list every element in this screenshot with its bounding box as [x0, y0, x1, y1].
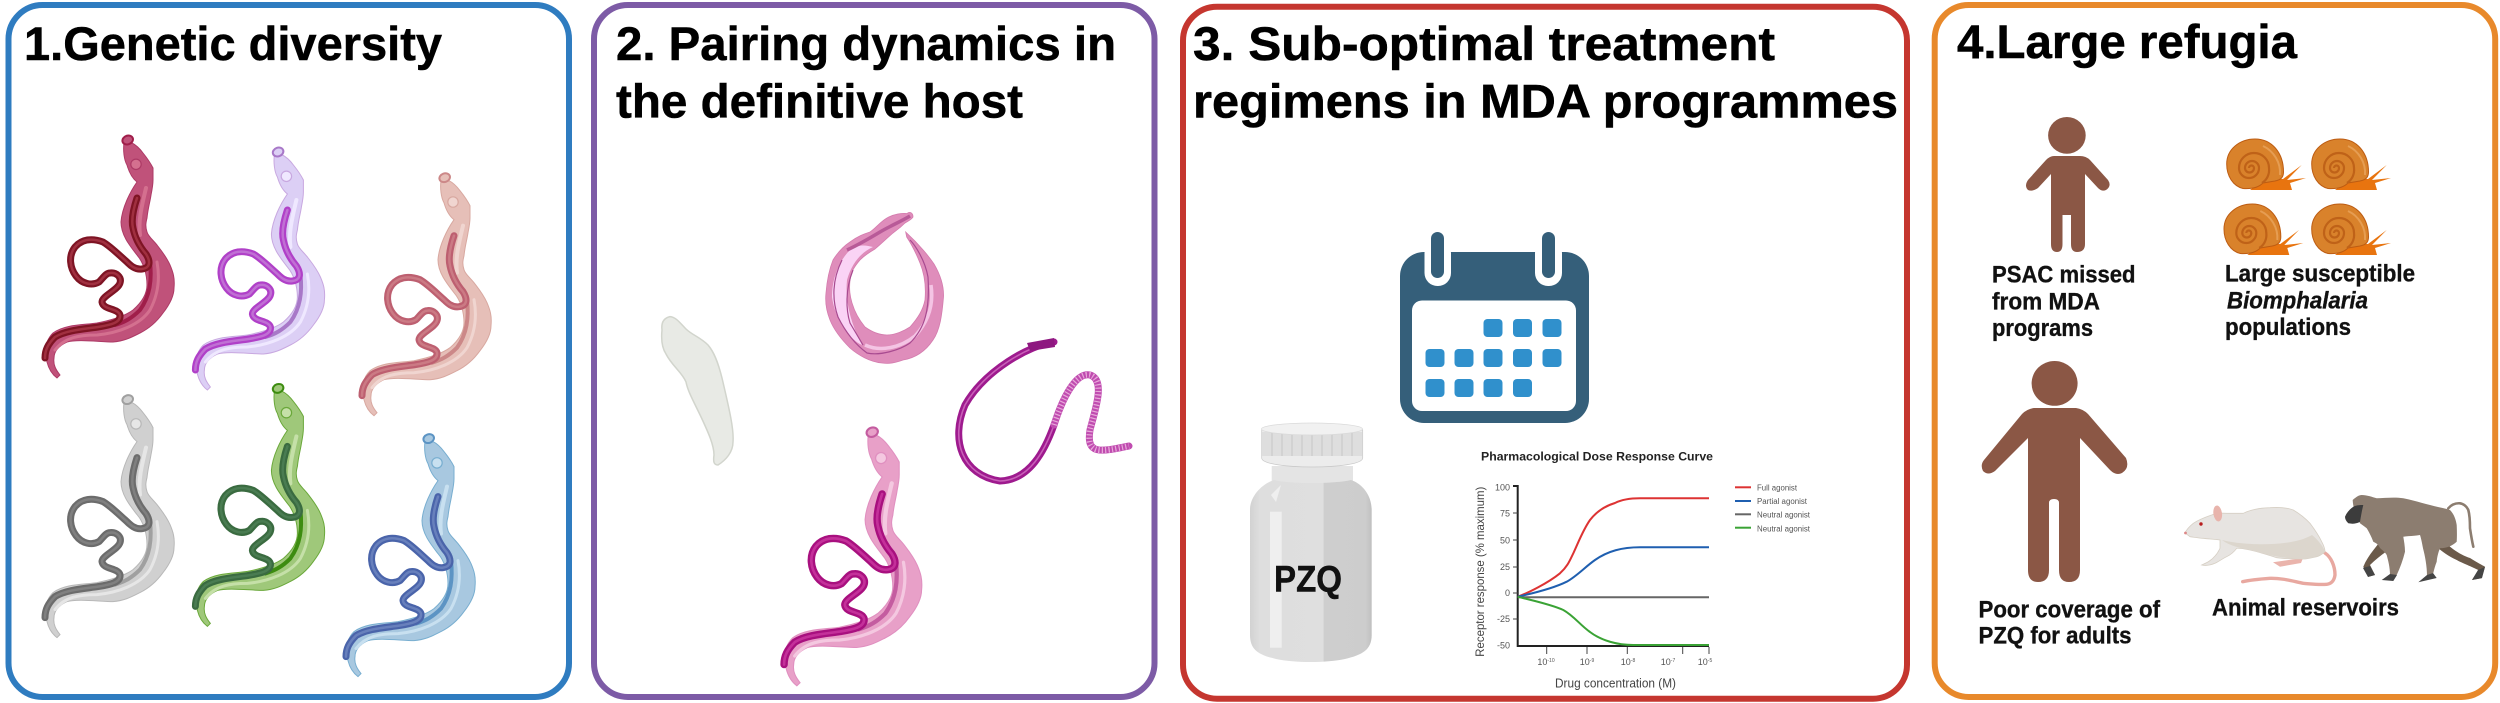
panel 2 frame — [594, 5, 1154, 697]
heading 2 second line: the definitive host — [616, 74, 1023, 128]
x axis ticks: 10 — [1698, 657, 1708, 667]
panel: genetic diversity — [8, 5, 569, 697]
icon: snails — [2224, 139, 2391, 255]
curve: partial agonist — [1518, 547, 1709, 597]
label: adults: PZQ for adults — [1978, 622, 2132, 650]
panel: pairing dynamics — [594, 5, 1154, 697]
chart legend: Partial agonist — [1757, 497, 1808, 506]
worm: green — [195, 383, 325, 626]
curve: neutral grey — [1518, 596, 1709, 598]
worm: crimson — [45, 134, 174, 378]
x axis ticks — [1537, 657, 1712, 667]
panel 3 frame — [1183, 7, 1907, 699]
worm: grey — [45, 394, 174, 638]
worm: magenta female — [959, 338, 1129, 481]
axes — [1513, 486, 1709, 646]
icon: PZQ bottle — [1250, 423, 1372, 662]
curve: green agonist — [1518, 597, 1709, 645]
chart: dose response curve — [1473, 450, 1811, 691]
chart title: Pharmacological Dose Response Curve — [1481, 450, 1713, 464]
y axis title: Receptor response (% maximum) — [1473, 487, 1487, 657]
worm: rose — [362, 172, 491, 416]
label: adults: Poor coverage of — [1978, 596, 2161, 624]
label: PSAC — [1992, 262, 2136, 342]
worm: pale flatworm — [662, 317, 733, 465]
panel 4 frame — [1935, 5, 2495, 697]
chart legend — [1735, 484, 1811, 534]
heading 3 second line: regimens in MDA programmes — [1193, 74, 1898, 128]
heading 1: 1.Genetic diversity — [24, 17, 442, 70]
icon: calendar — [1400, 232, 1589, 423]
y axis ticks — [1495, 482, 1510, 650]
panel: large refugia — [1935, 5, 2495, 697]
label: Biomphalaria — [2225, 261, 2415, 341]
icon: monkey — [2345, 495, 2485, 582]
label: adults — [1978, 596, 2161, 650]
panel 1 frame — [8, 5, 569, 697]
y axis ticks: -25 — [1497, 614, 1510, 624]
x axis ticks: -7 — [1671, 658, 1675, 664]
heading 2: 2. Pairing dynamics in — [616, 17, 1116, 70]
x axis ticks: -5 — [1708, 658, 1712, 664]
y axis ticks: 100 — [1495, 482, 1510, 492]
icon: adult — [1982, 361, 2127, 582]
x axis ticks: -9 — [1590, 658, 1594, 664]
y axis ticks: 25 — [1500, 562, 1510, 572]
y axis ticks: 75 — [1500, 508, 1510, 518]
label: animal reservoirs: Animal reservoirs — [2212, 595, 2399, 622]
x axis ticks: 10 — [1661, 657, 1671, 667]
heading 3: 3. Sub-optimal treatment — [1193, 17, 1775, 70]
icon: rat — [2184, 505, 2335, 585]
chart legend: Neutral agonist — [1757, 510, 1811, 520]
curve: full agonist — [1518, 498, 1709, 597]
x axis ticks: 10 — [1621, 657, 1631, 667]
chart legend: Full agonist — [1757, 484, 1798, 492]
label: PSAC: from MDA — [1992, 288, 2100, 315]
worm: pink male with female — [784, 426, 922, 686]
heading 4: 4.Large refugia — [1957, 15, 2298, 68]
x axis ticks: -10 — [1547, 658, 1555, 664]
x axis ticks: 10 — [1580, 657, 1590, 667]
worm: lavender — [195, 146, 325, 390]
chart legend: Neutral agonist — [1757, 524, 1811, 534]
label: PSAC: programs — [1992, 315, 2093, 342]
label: Biomphalaria: populations — [2225, 314, 2351, 341]
y axis ticks: 0 — [1505, 588, 1510, 598]
icon: child — [2026, 117, 2110, 252]
x axis ticks: 10 — [1537, 657, 1547, 667]
bottle label: PZQ — [1274, 559, 1342, 600]
x axis ticks: -8 — [1631, 658, 1635, 664]
x axis title: Drug concentration (M) — [1555, 677, 1676, 691]
y axis ticks: -50 — [1497, 640, 1510, 650]
label: Biomphalaria: Biomphalaria — [2227, 288, 2368, 314]
worm: coupled pair ring — [826, 212, 944, 363]
panel: sub-optimal treatment — [1183, 7, 1907, 699]
worm: blue — [346, 433, 475, 677]
label: PSAC: PSAC missed — [1992, 262, 2136, 288]
y axis ticks: 50 — [1500, 536, 1510, 546]
label: Biomphalaria: Large susceptible — [2225, 261, 2415, 288]
